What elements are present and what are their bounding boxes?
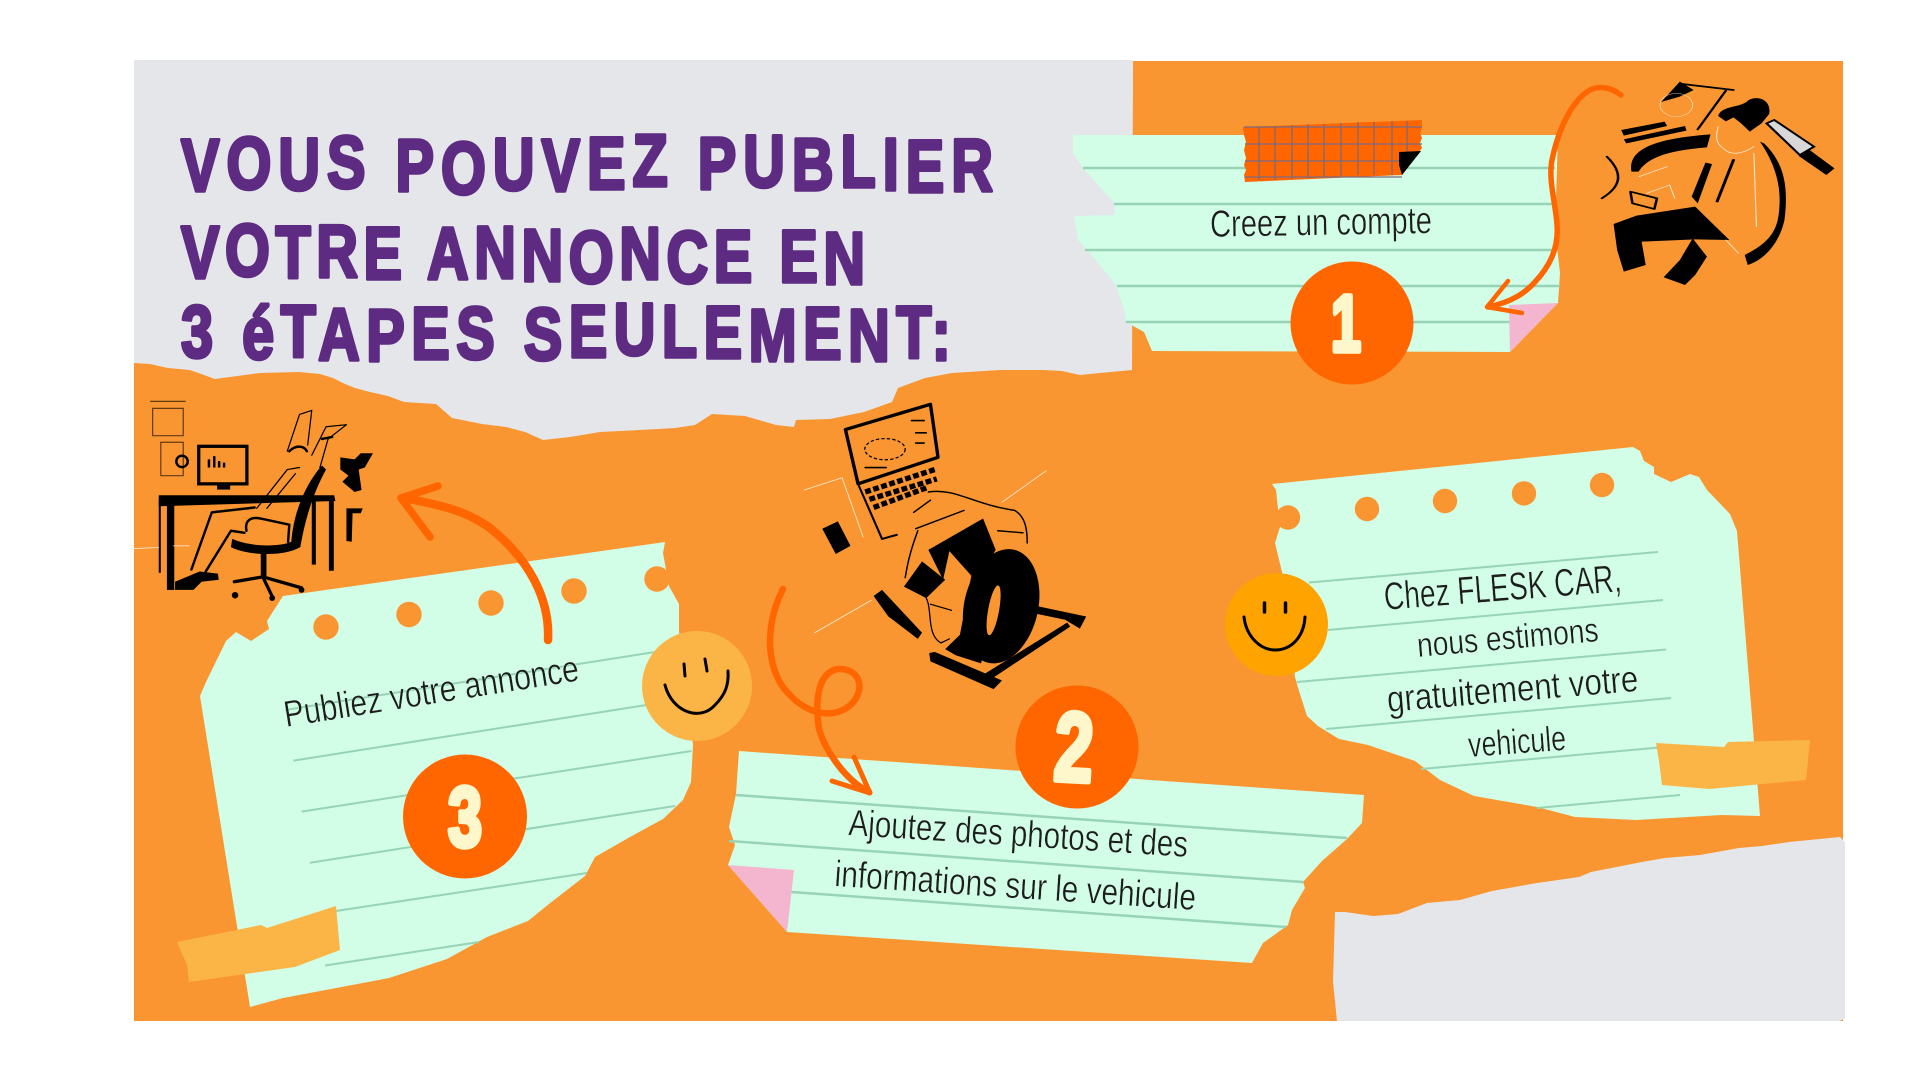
text: estimate <box>1382 557 1640 765</box>
title <box>181 120 993 378</box>
badge: number 2 <box>1016 686 1138 808</box>
punch holes <box>1276 473 1614 530</box>
arrow: to step 3 illustration <box>401 486 548 640</box>
icon: smiley left <box>642 631 752 741</box>
text: estimate: nous estimons <box>1415 611 1600 665</box>
panel: step 3 note <box>177 542 693 1007</box>
punch holes <box>313 566 670 640</box>
arrow: to step 1 note <box>1487 88 1621 313</box>
badge: number 1 <box>1290 262 1414 384</box>
badge: number 1: 1 <box>1331 279 1361 368</box>
torn grey title panel <box>134 60 1133 440</box>
icon: man with laptop on chair <box>1602 82 1834 285</box>
badge: number 2: 2 <box>1052 691 1096 803</box>
tape: yellow <box>1656 740 1810 789</box>
text: estimate: Chez FLESK CAR, <box>1382 557 1623 619</box>
text: step 2: Ajoutez des photos et des <box>847 802 1189 865</box>
title: VOTRE ANNONCE EN <box>181 210 865 301</box>
text: step 2 <box>833 802 1197 918</box>
panel: estimate note <box>1272 447 1810 820</box>
text: step 1: Creez un compte <box>1210 200 1432 246</box>
badge: number 3 <box>403 754 527 878</box>
torn grey bottom-right panel <box>1333 837 1845 1021</box>
text: step 3: Publiez votre annonce <box>281 648 582 735</box>
title: 3 éTAPES SEULEMENT: <box>181 289 951 378</box>
icon: smiley right <box>1225 573 1328 676</box>
tape: orange grid <box>1243 120 1422 182</box>
panel: step 2 note <box>728 686 1364 963</box>
badge: number 3: 3 <box>448 770 482 864</box>
note corner: pink fold <box>1509 303 1558 352</box>
text: estimate: gratuitement votre <box>1385 658 1640 720</box>
icon: person stretching at desk <box>120 401 373 601</box>
text: estimate: vehicule <box>1467 719 1567 765</box>
text: step 2: informations sur le vehicule <box>833 853 1197 918</box>
tape: yellow <box>177 906 340 982</box>
arrow: to step 2 note <box>770 589 870 793</box>
title: VOUS POUVEZ PUBLIER <box>181 120 993 211</box>
orange background panel <box>134 61 1843 1021</box>
note corner: pink fold <box>728 865 794 932</box>
icon: person at laptop <box>804 404 1086 689</box>
panel: step 1 note <box>1073 120 1560 384</box>
